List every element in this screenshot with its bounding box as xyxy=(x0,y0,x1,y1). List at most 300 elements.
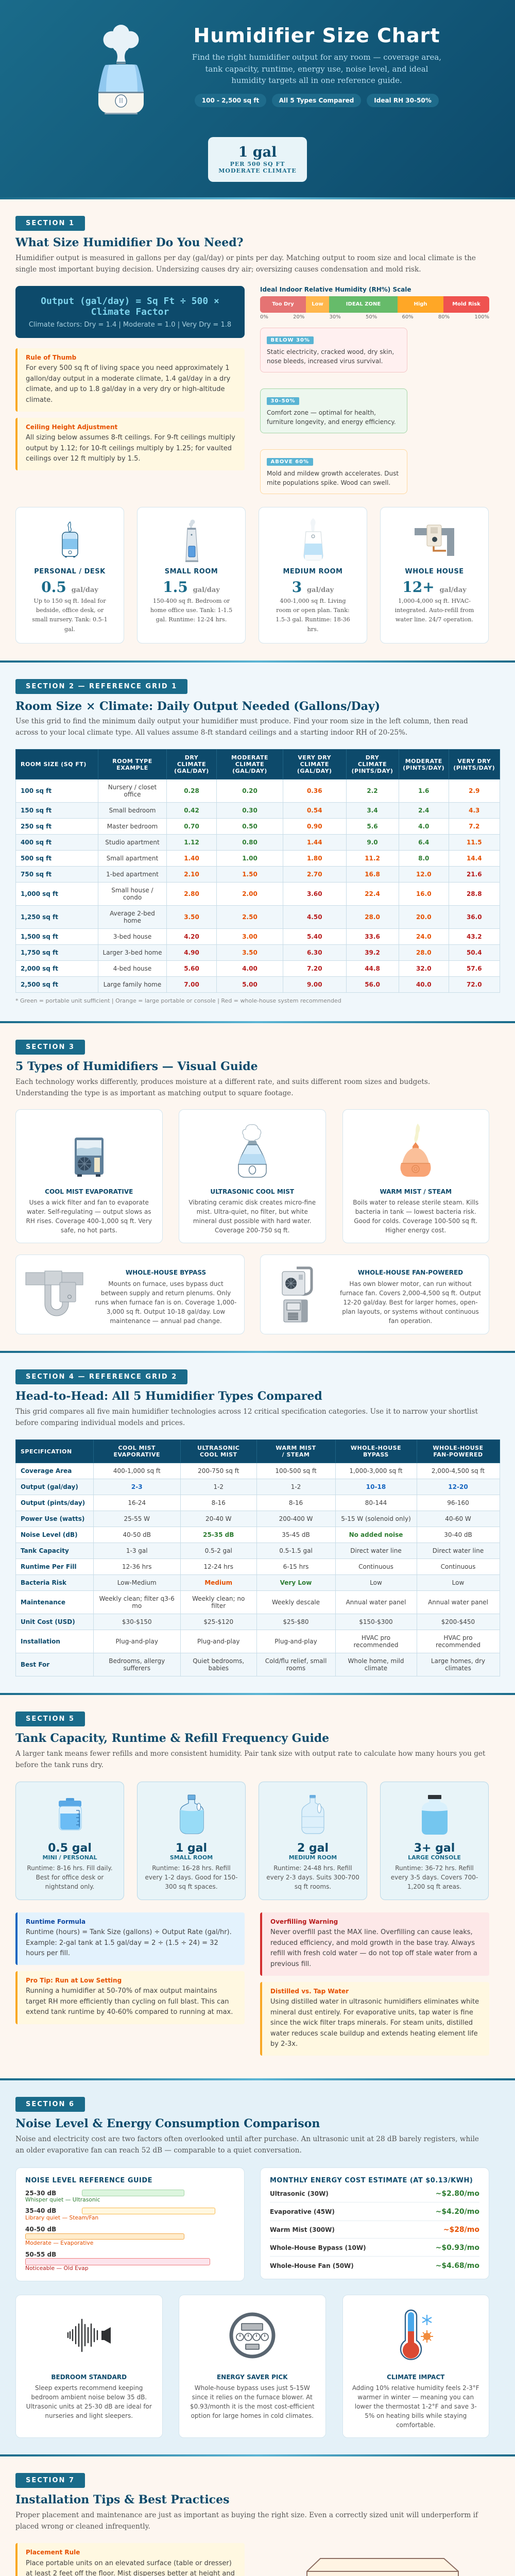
table: type comparison: 8-16 xyxy=(212,1499,226,1506)
table: room size by climate: 4.0 xyxy=(418,823,429,830)
intro paragraph xyxy=(15,254,476,274)
icon: 1 gallon jug xyxy=(180,1795,204,1834)
intro paragraph: Noise and electricity cost are two factors often overlooked until after purchase. An ultrasonic unit at 28 dB barely registers, while xyxy=(15,2135,479,2143)
table: room size by climate: 150 sq ft xyxy=(21,807,52,814)
card: 3+ gal: LARGE CONSOLE xyxy=(408,1854,461,1861)
stat box: 1 gal per 500 sq ft xyxy=(208,137,307,182)
table: room size by climate: 0.70 xyxy=(184,823,199,830)
card: cool mist evaporative: safe, no hot parts. xyxy=(61,1227,117,1234)
table: room size by climate: CLIMATE xyxy=(300,761,329,768)
callout: ceiling height xyxy=(15,418,245,470)
callout: runtime formula: Runtime (hours) = Tank Size (gallons) ÷ Output Rate (gal/hr). xyxy=(26,1928,232,1936)
card: whole house xyxy=(380,507,489,643)
callout: distilled vs tap: Using distilled water in ultrasonic humidifiers eliminates white xyxy=(270,1998,479,2006)
table: room size by climate: (GAL/DAY) xyxy=(297,768,332,774)
callout: pro tip xyxy=(15,1971,245,2024)
illustration: room airflow diagram xyxy=(306,2558,459,2576)
card: warm mist steam xyxy=(342,1109,489,1243)
table: room size by climate: 2.80 xyxy=(184,890,199,897)
panel: monthly energy cost: Warm Mist (300W) xyxy=(270,2226,335,2233)
table: type comparison: Direct water line xyxy=(433,1547,484,1554)
panel: noise level reference: 35-40 dB xyxy=(25,2207,56,2214)
callout: runtime formula: Runtime Formula xyxy=(26,1918,85,1925)
table: room size by climate: MODERATE xyxy=(231,754,268,761)
table: room size by climate: 28.0 xyxy=(365,913,380,921)
table: type comparison: 12-36 hrs xyxy=(122,1563,151,1570)
table: type comparison: 96-160 xyxy=(447,1499,469,1506)
table: type comparison: $30-$150 xyxy=(122,1618,152,1625)
table: type comparison xyxy=(15,1439,500,1676)
table: room size by climate: Small apartment xyxy=(107,855,158,862)
icon: electric meter xyxy=(230,2312,275,2359)
table: room size by climate: 12.0 xyxy=(416,871,432,878)
panel: monthly energy cost: ~$4.68/mo xyxy=(436,2262,479,2270)
panel: noise level reference: Moderate — Evaporative xyxy=(25,2240,93,2246)
section badge: SECTION 4 — REFERENCE GRID 2 xyxy=(26,1373,177,1381)
chart: RH scale: 80% xyxy=(438,314,450,320)
table: room size by climate: home xyxy=(124,917,141,924)
panel: below 30%: nose bleeds, increased virus survival. xyxy=(267,358,383,365)
intro paragraph xyxy=(15,1078,430,1097)
card: whole house fan powered: furnace fan. Covers 2,000-4,500 sq ft. Output xyxy=(340,1289,481,1296)
callout: pro tip: extend tank runtime by 40-60% compared to running at max. xyxy=(26,2008,233,2016)
card: small room xyxy=(137,507,246,643)
table: room size by climate: 4-bed house xyxy=(113,965,151,972)
section badge: SECTION 2 — REFERENCE GRID 1 xyxy=(26,683,177,690)
intro paragraph: an older evaporative fan can reach 52 dB — comparable to a quiet conversation. xyxy=(15,2146,302,2155)
table: room size by climate: 5.00 xyxy=(242,981,258,988)
card: whole house bypass: maintenance — annual pad change. xyxy=(110,1317,222,1324)
callout: ceiling height: Ceiling Height Adjustment xyxy=(26,423,117,431)
card: ultrasonic cool mist: Coverage 200-750 sq ft. xyxy=(215,1227,289,1234)
table: room size by climate: 6.4 xyxy=(418,839,429,846)
card: 1 gal: 300 sq ft spaces. xyxy=(165,1883,218,1890)
table: room size by climate: Small bedroom xyxy=(109,807,156,814)
card: medium room: 3 gal/day xyxy=(292,579,334,596)
tag pills: 100 - 2,500 sq ft xyxy=(202,97,259,104)
table: type comparison: 1-2 xyxy=(291,1483,301,1490)
card: whole house: integrated. Auto-refill from xyxy=(395,607,474,614)
table: room size by climate: condo xyxy=(123,894,142,901)
intro paragraph: across to your local climate type. All values assume 8-ft standard ceilings and a starting indoor RH of 20-25%. xyxy=(15,728,407,737)
card: whole house: 1,000-4,000 sq ft. HVAC- xyxy=(398,598,471,604)
card: personal desk: 0.5 gal/day xyxy=(41,579,98,596)
tag pills xyxy=(195,94,439,107)
table: room size by climate: 1.00 xyxy=(242,855,258,862)
table: room size by climate: VERY DRY xyxy=(298,754,331,761)
callout: overfilling warning: Overfilling Warning xyxy=(270,1918,338,1925)
intro paragraph xyxy=(15,1750,485,1769)
table: room size by climate: 5.60 xyxy=(184,965,199,972)
card: small room: SMALL ROOM xyxy=(165,568,218,575)
section badge: SECTION 7 xyxy=(26,2477,75,2484)
table: room size by climate: 22.4 xyxy=(365,890,380,897)
table: type comparison: 80-144 xyxy=(365,1499,387,1506)
chart: RH scale: IDEAL ZONE xyxy=(346,301,381,307)
table: type comparison: Noise Level (dB) xyxy=(21,1531,78,1538)
table: room size by climate: ROOM SIZE (SQ FT) xyxy=(21,761,87,768)
table: room size by climate: 1,500 sq ft xyxy=(21,933,58,940)
table: room size by climate: (PINTS/DAY) xyxy=(352,768,393,774)
icon: humidifier with mist xyxy=(98,25,144,114)
card: energy saver pick: since it relies on the furnace blower. At xyxy=(192,2394,313,2401)
table: room size by climate: 3.50 xyxy=(184,913,199,921)
table: room size by climate: 0.80 xyxy=(242,839,258,846)
card: ultrasonic cool mist: mist. Ultra-quiet, no filter, but white xyxy=(197,1208,308,1215)
section badge: SECTION 5 xyxy=(26,1715,75,1723)
callout: distilled vs tap: by 2-3x. xyxy=(270,2040,298,2048)
panel: 30-50% xyxy=(260,388,407,433)
table: type comparison: Plug-and-play xyxy=(116,1638,158,1645)
table: room size by climate: 33.6 xyxy=(365,933,380,940)
section 7: installation tips xyxy=(0,2456,515,2576)
panel: 30-50%: furniture longevity, and energy efficiency. xyxy=(267,418,396,426)
section 5: tank capacity xyxy=(0,1695,515,2078)
section badge xyxy=(15,2473,85,2488)
callout: ceiling height: All sizing below assumes 8-ft ceilings. For 9-ft ceilings multiply xyxy=(26,434,235,442)
card: whole house fan powered xyxy=(260,1254,489,1334)
callout: rule of thumb xyxy=(15,348,245,412)
table: room size by climate: 57.6 xyxy=(467,965,482,972)
table: room size by climate: 1.6 xyxy=(418,787,429,794)
intro paragraph xyxy=(15,2135,479,2155)
card: whole house bypass xyxy=(15,1254,245,1334)
card: climate impact: lower the thermostat 1-2°F and save 3- xyxy=(355,2403,477,2410)
callout: runtime formula: hours per fill. xyxy=(26,1950,70,1957)
intro paragraph: Understanding the type is as important as matching output to square footage. xyxy=(15,1089,294,1097)
table: type comparison: $25-$120 xyxy=(203,1618,233,1625)
intro paragraph: Humidifier output is measured in gallons per day (gal/day) or pints per day. Matching output to room size and local climate is the xyxy=(15,254,476,262)
table: type comparison: Weekly descale xyxy=(272,1599,320,1606)
intro paragraph: Use this grid to find the minimum daily output your humidifier must produce. Find your room size in the left column, then read xyxy=(15,717,468,725)
card: small room: 150-400 sq ft. Bedroom or xyxy=(153,598,230,604)
table: room size by climate: Studio apartment xyxy=(105,839,160,846)
table: room size by climate: 1.44 xyxy=(307,839,322,846)
panel: below 30% xyxy=(260,328,407,372)
table: room size by climate: 16.0 xyxy=(416,890,432,897)
table: type comparison: 2,000-4,500 sq ft xyxy=(432,1467,485,1475)
table: type comparison: 20-40 W xyxy=(205,1515,232,1522)
table: room size by climate: 4.50 xyxy=(307,913,322,921)
card: bedroom standard: Sleep experts recommend keeping xyxy=(35,2384,143,2392)
panel: above 60%: ABOVE 60% xyxy=(271,459,309,465)
card: climate impact: CLIMATE IMPACT xyxy=(387,2374,444,2381)
table: type comparison: climates xyxy=(445,1665,471,1672)
table: room size by climate: CLIMATE xyxy=(358,761,387,768)
panel: monthly energy cost: ~$2.80/mo xyxy=(436,2190,479,2198)
card: small room: gal. Runtime: 12-24 hrs. xyxy=(156,616,227,623)
table: type comparison: 5-15 W (solenoid only) xyxy=(341,1515,411,1522)
card: energy saver pick: $0.93/month it is the most cost-efficient xyxy=(190,2403,315,2410)
table: room size by climate: 1,000 sq ft xyxy=(21,890,58,897)
callout: overfilling warning: previous fill. xyxy=(270,1960,311,1968)
card: personal desk: small nursery. Tank: 0.5-1 xyxy=(32,616,108,623)
table: type comparison: HVAC pro xyxy=(362,1634,390,1641)
table: room size by climate: 0.90 xyxy=(307,823,322,830)
table: room size by climate: 11.5 xyxy=(467,839,482,846)
section 4: head to head grid xyxy=(0,1353,515,1693)
table: type comparison: / STEAM xyxy=(282,1451,310,1458)
tag pills: Ideal RH 30-50% xyxy=(374,97,432,104)
intro paragraph xyxy=(15,2511,478,2531)
table: type comparison: Medium xyxy=(204,1579,232,1586)
table: type comparison: 10-18 xyxy=(366,1483,386,1490)
callout: overfilling warning: refill with fresh cold water — do not top off stale water from a xyxy=(270,1950,477,1957)
card: 3+ gal: every 3-5 days. Covers 700- xyxy=(391,1873,478,1880)
table: type comparison: WHOLE-HOUSE xyxy=(433,1445,484,1451)
table: room size by climate: 21.6 xyxy=(467,871,482,878)
table: type comparison: HVAC pro xyxy=(443,1634,473,1641)
callout: ceiling height: output by 1.12; for 10-ft ceilings multiply by 1.25; for vaulted xyxy=(26,445,232,452)
panel: monthly energy cost: ~$28/mo xyxy=(443,2226,479,2234)
card: cool mist evaporative: Uses a wick filter and fan to evaporate xyxy=(29,1199,149,1206)
card: cool mist evaporative: RH rises. Coverage 400-1,000 sq ft. Very xyxy=(26,1217,152,1225)
intro paragraph: Proper placement and maintenance are just as important as buying the right size. Even a correctly sized unit will underperform if xyxy=(15,2511,478,2519)
subtitle xyxy=(192,53,441,85)
table: room size by climate: 43.2 xyxy=(467,933,482,940)
card: 2 gal xyxy=(259,1782,367,1900)
icon: personal humidifier xyxy=(62,521,78,557)
table: type comparison: Weekly clean; no xyxy=(192,1595,245,1602)
card: ultrasonic cool mist: mineral dust possible with hard water. xyxy=(193,1217,312,1225)
section badge xyxy=(15,2097,85,2112)
panel: 30-50%: 30-50% xyxy=(271,398,296,404)
card: 1 gal: 1 gal xyxy=(176,1842,207,1855)
callout: runtime formula xyxy=(15,1912,245,1965)
table: type comparison: Unit Cost (USD) xyxy=(21,1618,75,1625)
chart: RH scale: 0% xyxy=(260,314,268,320)
callout: distilled vs tap: mineral dust entirely. For evaporative units, tap water is fine xyxy=(270,2009,473,2016)
card: whole house fan powered: plan layouts, or systems without continuous xyxy=(342,1308,479,1315)
table: room size by climate: 1,750 sq ft xyxy=(21,949,58,956)
heading: Room Size × Climate: Daily Output Needed (Gallons/Day) xyxy=(15,700,380,713)
callout: overfilling warning xyxy=(260,1912,489,1976)
callout: overfilling warning: Never overfill past the MAX line. Overfilling can cause leaks, xyxy=(270,1928,473,1936)
table: type comparison: 12-24 hrs xyxy=(204,1563,233,1570)
table: room size by climate: Large family home xyxy=(104,981,161,988)
table: type comparison: Output (gal/day) xyxy=(21,1483,78,1490)
panel: monthly energy cost: ~$0.93/mo xyxy=(436,2244,479,2252)
panel: noise level reference: 25-30 dB xyxy=(25,2190,56,2197)
intro paragraph: single most important buying decision. Undersizing causes dry air; oversizing causes condensation and mold risk. xyxy=(15,265,421,274)
intro paragraph: A larger tank means fewer refills and more consistent humidity. Pair tank size with output rate to calculate how many hours you get xyxy=(15,1750,485,1758)
table: room size by climate: office xyxy=(124,791,141,798)
table: room size by climate xyxy=(15,749,500,993)
table: room size by climate: 3-bed house xyxy=(113,933,151,940)
table: room size by climate: 36.0 xyxy=(467,913,482,921)
icon: small tank xyxy=(59,1798,81,1830)
card: whole house fan powered: 12-20 gal/day. Best for larger homes, open- xyxy=(343,1298,478,1306)
icon: medium humidifier xyxy=(304,518,323,561)
table: room size by climate: 9.00 xyxy=(307,981,322,988)
table: room size by climate: DRY xyxy=(185,754,198,761)
callout: distilled vs tap: since the wick filter traps minerals. For steam units, distilled xyxy=(270,2019,473,2027)
card: ultrasonic cool mist xyxy=(179,1109,325,1243)
card: whole house fan powered: fan operation. xyxy=(389,1317,432,1324)
card: small room: 1.5 gal/day xyxy=(163,579,220,596)
table: type comparison: COOL MIST xyxy=(200,1451,237,1458)
panel: noise level reference: Library quiet — Steam/Fan xyxy=(25,2214,98,2221)
table: room size by climate: Small house / xyxy=(111,887,153,894)
table: type comparison: 40-60 W xyxy=(445,1515,471,1522)
chart: RH scale: Low xyxy=(312,301,323,307)
table: type comparison: Bacteria Risk xyxy=(21,1579,66,1586)
table: room size by climate: 72.0 xyxy=(467,981,482,988)
panel: monthly energy cost: Whole-House Bypass (10W) xyxy=(270,2244,366,2251)
table: room size by climate: 11.2 xyxy=(365,855,380,862)
card: 2 gal: Runtime: 24-48 hrs. Refill xyxy=(273,1864,352,1871)
panel: noise level reference: NOISE LEVEL REFERENCE GUIDE xyxy=(25,2177,152,2184)
table: type comparison: recommended xyxy=(353,1641,398,1649)
table: type comparison: Plug-and-play xyxy=(197,1638,239,1645)
section badge: SECTION 1 xyxy=(26,219,75,227)
card: whole house bypass: between supply and return plenums. Only xyxy=(101,1289,231,1296)
card: 0.5 gal: nightstand only. xyxy=(45,1883,94,1890)
table: room size by climate: 5.40 xyxy=(307,933,322,940)
card: 3+ gal: 1,200 sq ft areas. xyxy=(407,1883,461,1890)
formula box: Output (gal/day) = Sq Ft ÷ 500 × xyxy=(41,296,219,307)
table: type comparison: Whole home, mild xyxy=(348,1657,404,1665)
section badge xyxy=(15,1040,85,1055)
intro paragraph: before the tank runs dry. xyxy=(15,1761,104,1769)
card: warm mist steam: Higher energy cost. xyxy=(385,1227,446,1234)
card: bedroom standard: nurseries and light sleepers. xyxy=(45,2412,133,2419)
table: type comparison: 30-40 dB xyxy=(444,1531,472,1538)
table: room size by climate: 0.54 xyxy=(307,807,322,814)
table: room size by climate: 28.8 xyxy=(467,890,482,897)
heading: 5 Types of Humidifiers — Visual Guide xyxy=(15,1060,258,1073)
chart: RH scale: 30% xyxy=(330,314,341,320)
card: personal desk xyxy=(15,507,124,643)
table: type comparison: 16-24 xyxy=(128,1499,146,1506)
table: room size by climate: 28.0 xyxy=(416,949,432,956)
chart: RH scale: Mold Risk xyxy=(452,301,480,307)
section badge xyxy=(15,679,187,694)
table: room size by climate: 250 sq ft xyxy=(21,823,52,830)
callout: pro tip: Running a humidifier at 50-70% of max output maintains xyxy=(26,1987,217,1995)
panel: monthly energy cost xyxy=(260,2167,489,2279)
card: warm mist steam: Good for colds. Coverage 100-500 sq ft. xyxy=(354,1217,477,1225)
title: Humidifier Size Chart xyxy=(193,24,440,47)
table: room size by climate: Master bedroom xyxy=(107,823,158,830)
table: type comparison: 40-50 dB xyxy=(123,1531,151,1538)
icon: warm mist humidifier xyxy=(401,1124,431,1177)
table: type comparison: filter xyxy=(211,1602,226,1609)
card: warm mist steam: WARM MIST / STEAM xyxy=(380,1188,452,1195)
table: type comparison: 1,000-3,000 sq ft xyxy=(349,1467,403,1475)
table: room size by climate: VERY DRY xyxy=(457,757,491,765)
card: energy saver pick xyxy=(179,2295,325,2438)
table: type comparison: Weekly clean; filter q3-6 xyxy=(99,1595,175,1602)
card: climate impact: 5% on heating bills while staying xyxy=(365,2412,467,2419)
table: room size by climate: 0.28 xyxy=(184,787,199,794)
callout: rule of thumb: For every 500 sq ft of living space you need approximately 1 xyxy=(26,364,230,372)
card: personal desk: gal. xyxy=(64,626,75,633)
table: type comparison: 25-35 dB xyxy=(203,1531,234,1538)
table: room size by climate: (PINTS/DAY) xyxy=(453,765,495,771)
stat box: 1 gal per 500 sq ft: MODERATE CLIMATE xyxy=(218,167,297,174)
table: type comparison: Low xyxy=(370,1579,382,1586)
table: room size by climate: 40.0 xyxy=(416,981,432,988)
table: type comparison: 6-15 hrs xyxy=(283,1563,308,1570)
header banner xyxy=(0,0,515,197)
panel: monthly energy cost: Evaporative (45W) xyxy=(270,2208,335,2215)
table: room size by climate: 0.50 xyxy=(242,823,258,830)
card: whole house: water line. 24/7 operation. xyxy=(396,616,473,623)
card: 0.5 gal: Runtime: 8-16 hrs. Fill daily. xyxy=(27,1864,113,1871)
callout: rule of thumb: climate, and up to 1.8 gal/day in a very dry or high-altitude xyxy=(26,385,225,393)
table: room size by climate: (GAL/DAY) xyxy=(174,768,209,774)
table: room size by climate: 1.40 xyxy=(184,855,199,862)
table: room size by climate: CLIMATE xyxy=(177,761,206,768)
heading: Head-to-Head: All 5 Humidifier Types Compared xyxy=(15,1389,322,1403)
card: climate impact: Adding 10% relative humidity feels 2-3°F xyxy=(352,2384,479,2392)
table: room size by climate: 7.00 xyxy=(184,981,199,988)
icon: small tower humidifier xyxy=(185,519,198,562)
table: room size by climate: 1,250 sq ft xyxy=(21,913,58,921)
heading: Tank Capacity, Runtime & Refill Frequency Guide xyxy=(15,1732,329,1745)
section badge xyxy=(15,1711,85,1726)
card: 1 gal xyxy=(137,1782,246,1900)
table: room size by climate: 9.0 xyxy=(367,839,378,846)
heading: Noise Level & Energy Consumption Comparison xyxy=(15,2117,320,2130)
card: energy saver pick: Whole-house bypass uses just 5-15W xyxy=(195,2384,310,2392)
callout: rule of thumb: climate. xyxy=(26,396,53,404)
table: type comparison: $25-$80 xyxy=(283,1618,309,1625)
table: room size by climate: 2.10 xyxy=(184,871,199,878)
table: type comparison: SPECIFICATION xyxy=(21,1448,72,1455)
table: room size by climate: 2,000 sq ft xyxy=(21,965,58,972)
card: medium room: room or open plan. Tank: xyxy=(276,607,350,614)
card: climate impact: comfortable. xyxy=(396,2421,435,2429)
table: room size by climate: 8.0 xyxy=(418,855,429,862)
table: room size by climate: 3.4 xyxy=(367,807,378,814)
section badge: SECTION 3 xyxy=(26,1043,75,1051)
section 2: room size by climate grid xyxy=(0,663,515,1021)
table: room size by climate: 500 sq ft xyxy=(21,855,52,862)
table: room size by climate: 100 sq ft xyxy=(21,787,52,794)
panel: monthly energy cost: MONTHLY ENERGY COST ESTIMATE (AT $0.13/KWH) xyxy=(270,2177,473,2184)
intro paragraph: This grid compares all five main humidifier technologies across 12 critical specification categories. Use it to narrow your shortlist xyxy=(15,1408,478,1416)
icon: fan powered humidifier xyxy=(282,1266,313,1322)
table: type comparison: Runtime Per Fill xyxy=(21,1563,77,1570)
callout: rule of thumb: gallon/day output in a moderate climate, 1.4 gal/day in a dry xyxy=(26,375,230,383)
callout: distilled vs tap: water reduces scale buildup and extends heating element life xyxy=(270,2030,478,2038)
card: medium room: 400-1,000 sq ft. Living xyxy=(280,598,346,604)
card: 2 gal: 2 gal xyxy=(297,1842,329,1855)
table: type comparison: COOL MIST xyxy=(118,1445,156,1451)
table: room size by climate: 4.90 xyxy=(184,949,199,956)
card: personal desk: bedside, office desk, or xyxy=(36,607,104,614)
chart: RH scale xyxy=(260,286,489,320)
section badge xyxy=(15,216,85,231)
table: room size by climate: 2.4 xyxy=(418,807,429,814)
card: cool mist evaporative xyxy=(15,1109,163,1243)
table: room size by climate: 44.8 xyxy=(365,965,380,972)
table: room size by climate: 2.70 xyxy=(307,871,322,878)
chart: RH scale: Ideal Indoor Relative Humidity (RH%) Scale xyxy=(260,286,411,293)
table: type comparison: Tank Capacity xyxy=(21,1547,69,1554)
table: type comparison: Best For xyxy=(21,1661,49,1668)
callout: placement rule xyxy=(15,2543,245,2576)
card: 0.5 gal: 0.5 gal xyxy=(48,1842,92,1855)
card: 1 gal: SMALL ROOM xyxy=(170,1854,213,1861)
chart: RH scale: 20% xyxy=(293,314,304,320)
card: medium room: hrs. xyxy=(307,626,318,633)
table: room size by climate: 2,500 sq ft xyxy=(21,981,58,988)
stat box: 1 gal per 500 sq ft: PER 500 SQ FT xyxy=(230,161,285,167)
card: 3+ gal: Runtime: 36-72 hrs. Refill xyxy=(395,1864,474,1871)
